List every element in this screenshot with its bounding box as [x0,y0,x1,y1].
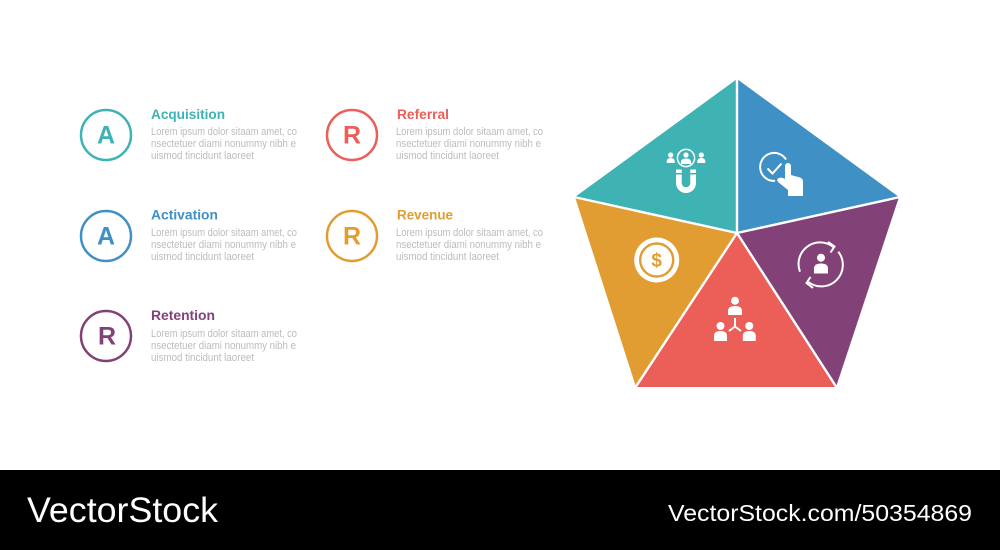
segment: purple [737,197,899,387]
item: Acquisition: A [97,122,115,150]
icon: person with cycle arrows [799,242,843,288]
item: Retention [81,308,297,364]
item: Referral: R [343,122,361,150]
watermark logo: VectorStock [27,490,218,530]
item: Revenue: Lorem ipsum dolor sitaam amet, co [396,227,543,239]
item: Acquisition: uismod tincidunt laoreet [151,150,254,162]
item: Acquisition: Lorem ipsum dolor sitaam amet, co [151,126,297,138]
icon: people hierarchy [714,297,756,341]
item: Referral: uismod tincidunt laoreet [396,150,499,162]
icon: hand with check [760,153,803,196]
item: Activation: Activation [151,208,218,222]
watermark url: VectorStock.com/50354869 [668,500,972,526]
item: Acquisition: nsectetuer diami nonummy nibh e [151,138,296,150]
icon: dollar coin: $ [651,250,662,272]
item: Referral: Lorem ipsum dolor sitaam amet, co [396,126,543,138]
item: Retention: R [98,322,116,350]
pentagon chart [574,78,900,388]
item: Activation: nsectetuer diami nonummy nibh e [151,239,296,251]
item: Revenue: Revenue [397,208,453,222]
item: Referral: Referral [397,107,449,122]
item: Activation [81,208,297,263]
segment: red [636,233,836,387]
item: Retention: Retention [151,308,215,323]
item: Revenue: R [343,222,361,250]
item: Retention: uismod tincidunt laoreet [151,352,254,364]
item: Acquisition: Acquisition [151,107,225,122]
item: Referral: nsectetuer diami nonummy nibh e [396,138,541,150]
segment: blue [737,79,899,233]
item: Retention: nsectetuer diami nonummy nibh e [151,340,296,352]
item: Activation: uismod tincidunt laoreet [151,251,254,263]
segment: teal [575,79,737,233]
icon: magnet with people [667,149,705,193]
item: Activation: A [97,222,115,250]
item: Acquisition [81,107,297,162]
segment dividers [574,78,900,388]
icon: dollar coin [634,238,679,282]
item: Revenue [327,208,543,263]
item: Activation: Lorem ipsum dolor sitaam amet, co [151,227,297,239]
item: Revenue: uismod tincidunt laoreet [396,251,499,263]
footer bar [0,470,1000,550]
item: Retention: Lorem ipsum dolor sitaam amet, co [151,328,297,340]
segment: orange [575,197,737,387]
item: Revenue: nsectetuer diami nonummy nibh e [396,239,541,251]
item: Referral [327,107,543,162]
